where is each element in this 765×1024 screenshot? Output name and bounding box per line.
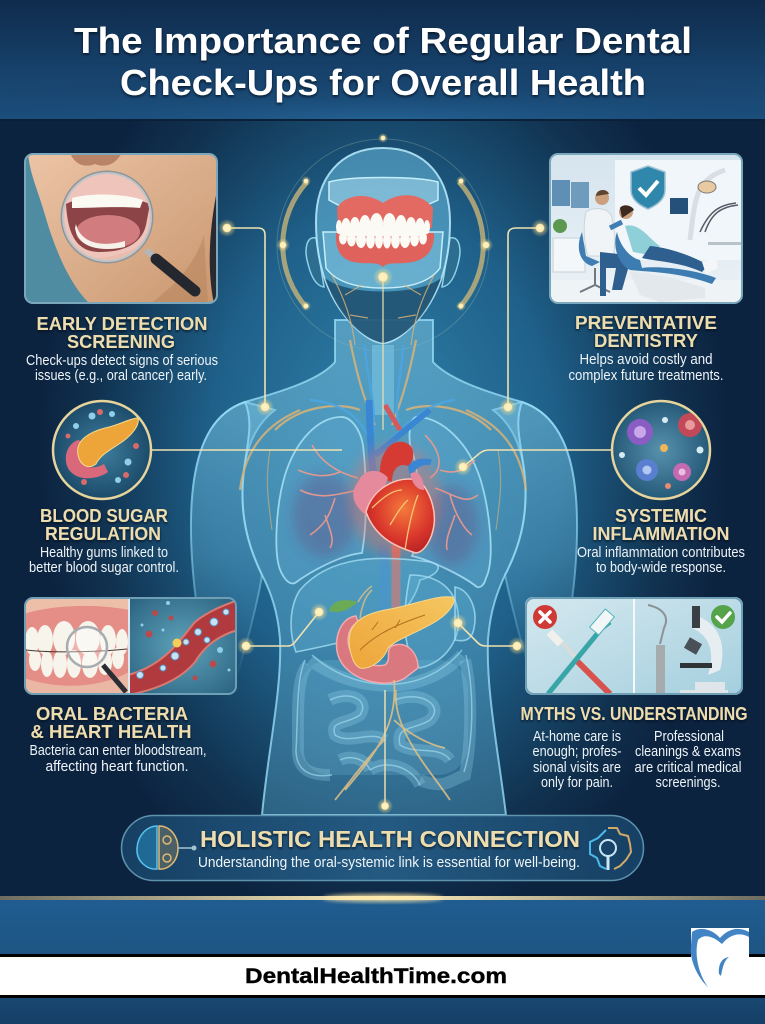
panel: holistic health connection [122,816,644,880]
image: magnified mouth [24,153,218,304]
holistic description: Understanding the oral-systemic link is essential for well-being. [198,855,580,871]
heading: SYSTEMIC [615,505,707,526]
image: dental office [549,153,743,304]
icon: brain [137,826,196,869]
halo rings around head [276,133,493,351]
description [29,545,179,576]
arms [191,402,577,680]
heading: ORAL BACTERIA [36,703,188,724]
equipment arm [690,170,725,240]
panel: blood sugar regulation [29,401,179,576]
intestines [296,650,472,785]
footer band [0,898,765,1024]
torso and neck [242,320,526,815]
heading [592,505,730,544]
image: toothbrushes and microscope [525,597,743,695]
icon: check [711,605,735,629]
connector nodes [218,219,549,814]
shield [631,166,665,209]
image: teeth and artery [24,597,238,695]
description: Helps avoid costly and [580,352,712,368]
myth text: enough; profes- [532,744,622,760]
liver and stomach [291,558,475,668]
connector lines [152,228,612,806]
heading: DENTISTRY [594,330,699,351]
nerves in shoulders [240,340,526,530]
patient and chair [619,205,633,219]
human figure [191,133,577,815]
description: Bacteria can enter bloodstream, [30,743,206,759]
heading [30,703,192,742]
panel: preventative dentistry [549,153,743,384]
icon: cross [533,605,557,629]
abdominal nerves [335,680,450,800]
heading [575,312,717,351]
head [316,148,450,343]
heading [36,313,208,352]
description [577,545,745,576]
lungs [276,417,491,587]
neck and trachea [372,345,394,415]
panel: early detection screening [24,153,218,384]
understanding text: screenings. [656,775,720,791]
gold divider [0,894,765,902]
icon: microbes circle [612,401,710,499]
website: DentalHealthTime.com [245,965,507,988]
icon: pancreas circle [53,401,151,499]
gallbladder [329,600,358,612]
logo: tooth [691,928,749,987]
bronchi [298,435,478,550]
icon: gear [590,828,631,870]
understanding text [634,729,742,791]
panel: oral bacteria and heart health [24,597,238,775]
myth text: only for pain. [541,775,613,791]
ears [306,238,460,287]
description [30,743,206,775]
title: The Importance of Regular Dental [74,20,692,61]
understanding text: are critical medical [634,760,742,776]
description [26,353,218,384]
lung tint [293,473,357,557]
description [568,352,724,384]
understanding text: Professional [654,729,724,745]
description: Check-ups detect signs of serious [26,353,218,369]
doctor [595,193,609,205]
heart [349,442,441,556]
heading: EARLY DETECTION [36,313,208,334]
holistic heading: HOLISTIC HEALTH CONNECTION [200,826,580,852]
description: complex future treatments. [568,368,724,384]
header band [0,0,765,121]
description: to body-wide response. [596,560,726,576]
heading: INFLAMMATION [592,523,730,544]
teeth [336,213,430,248]
footer white strip [0,954,765,998]
description: issues (e.g., oral cancer) early. [35,368,207,384]
description: better blood sugar control. [29,560,179,576]
panel: myths vs understanding [520,597,748,791]
clear dental trays [329,178,438,206]
title: Check-Ups for Overall Health [120,62,646,103]
description: affecting heart function. [46,759,188,775]
myth text: At-home care is [533,729,621,745]
title [74,20,692,103]
myth text [532,729,622,791]
body background [0,118,765,898]
heading: SCREENING [67,331,175,352]
description: Oral inflammation contributes [577,545,745,561]
gums [337,195,433,228]
duodenum [337,616,418,683]
facial nerves [332,275,434,345]
understanding text: cleanings & exams [635,744,741,760]
heading: BLOOD SUGAR [40,505,168,526]
heading: & HEART HEALTH [30,721,192,742]
panel: systemic inflammation [577,401,745,576]
pancreas [349,597,454,668]
description: Healthy gums linked to [40,545,168,561]
heading: REGULATION [45,523,161,544]
myth text: sional visits are [533,760,621,776]
stool [579,232,600,266]
heading: PREVENTATIVE [575,312,717,333]
heading [40,505,168,544]
great vessels [369,400,430,610]
